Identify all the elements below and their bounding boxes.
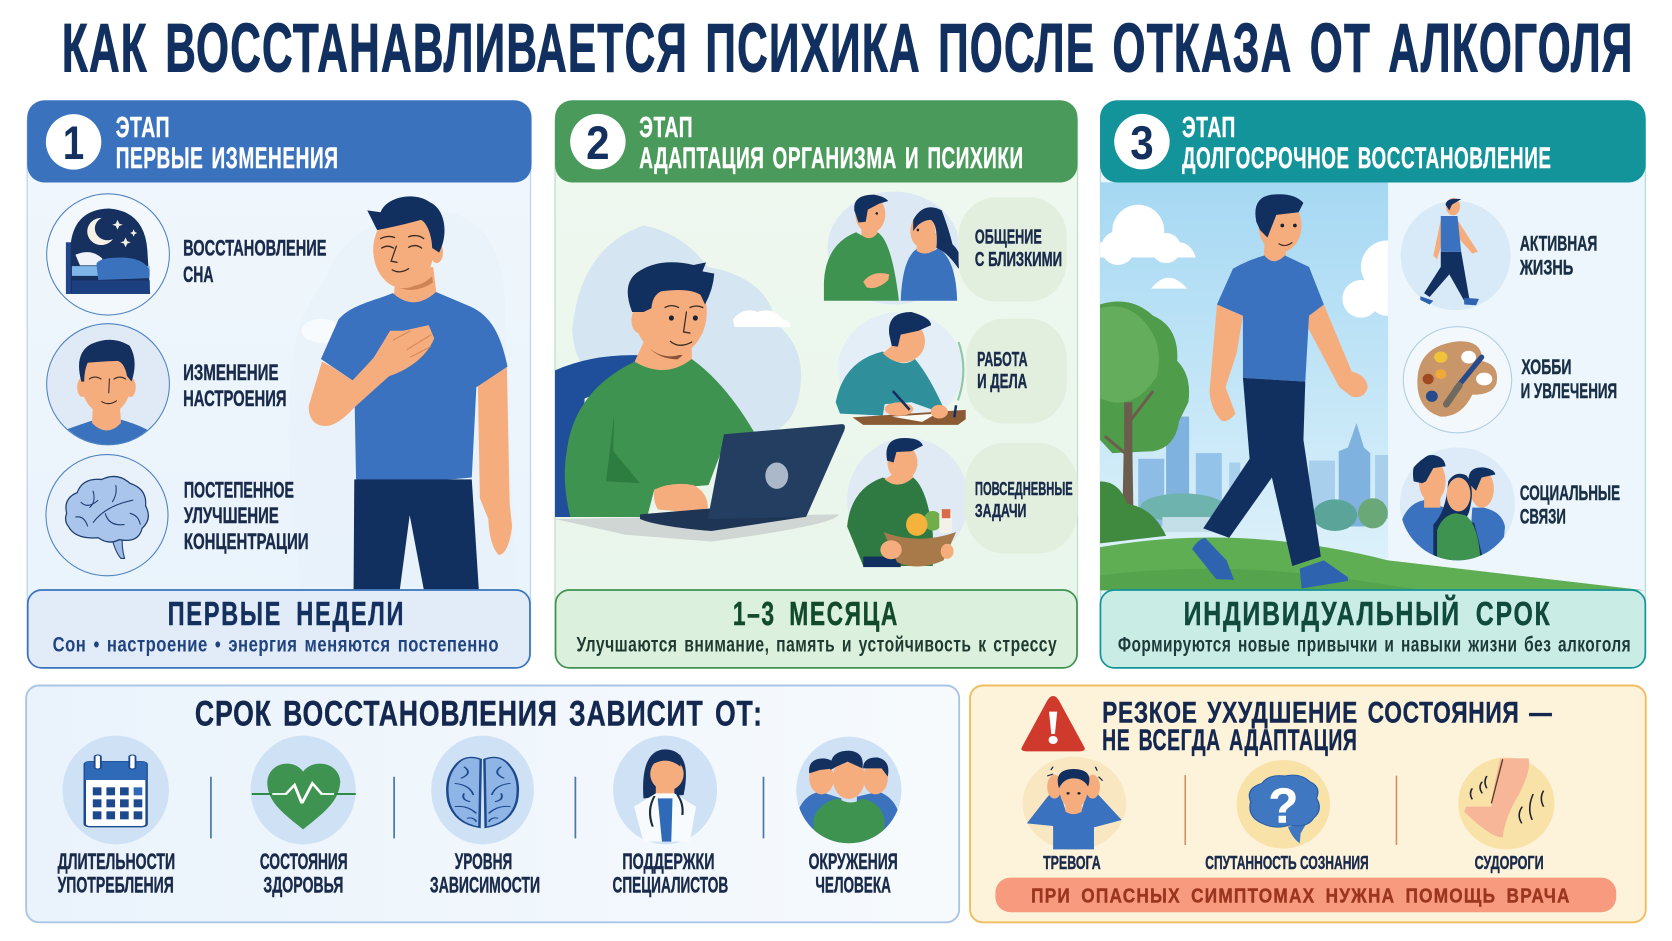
stage 1 header: ПЕРВЫЕ ИЗМЕНЕНИЯ bbox=[116, 142, 339, 175]
stage 2 header bbox=[555, 100, 1078, 182]
panel: stage 1 bbox=[27, 100, 532, 668]
stage 2 header: 2 bbox=[586, 117, 610, 169]
warning labels: СПУТАННОСТЬ СОЗНАНИЯ bbox=[1205, 852, 1369, 873]
warning heading: НЕ ВСЕГДА АДАПТАЦИЯ bbox=[1102, 724, 1357, 757]
stage 1 duration box: ПЕРВЫЕ НЕДЕЛИ bbox=[168, 596, 405, 633]
icon bubbles: activity backgrounds bbox=[959, 197, 1077, 554]
icon: palette hobby bbox=[1403, 327, 1512, 433]
stage 3 duration box bbox=[1100, 590, 1645, 668]
labels: first changes: УЛУЧШЕНИЕ bbox=[184, 503, 279, 528]
factor labels: ДЛИТЕЛЬНОСТИ bbox=[58, 849, 175, 874]
stage 3 header: 3 bbox=[1130, 117, 1154, 169]
warning panel background bbox=[970, 685, 1646, 922]
callout: see a doctor: ПРИ ОПАСНЫХ СИМПТОМАХ НУЖНА ПОМОЩЬ ВРАЧА bbox=[1031, 885, 1571, 907]
divider bbox=[211, 777, 763, 838]
labels: first changes: ИЗМЕНЕНИЕ bbox=[183, 360, 279, 385]
labels: long-term recovery: ЖИЗНЬ bbox=[1519, 255, 1573, 279]
factor labels: ЗАВИСИМОСТИ bbox=[430, 873, 540, 898]
factor labels: УРОВНЯ bbox=[455, 849, 512, 874]
stage 2 header: АДАПТАЦИЯ ОРГАНИЗМА И ПСИХИКИ bbox=[639, 142, 1024, 175]
stage 3 header: ЭТАП bbox=[1182, 112, 1236, 144]
labels: adaptation: ОБЩЕНИЕ bbox=[975, 227, 1042, 249]
icon: brain bbox=[46, 455, 168, 576]
labels: long-term recovery: И УВЛЕЧЕНИЯ bbox=[1521, 379, 1617, 403]
warning labels: ТРЕВОГА bbox=[1043, 852, 1101, 873]
factor labels: ПОДДЕРЖКИ bbox=[622, 849, 714, 874]
labels: adaptation: РАБОТА bbox=[977, 349, 1028, 371]
labels: long-term recovery: ХОББИ bbox=[1521, 355, 1571, 379]
labels: first changes: СНА bbox=[183, 262, 214, 287]
labels: adaptation: С БЛИЗКИМИ bbox=[975, 249, 1062, 271]
icon: active life bbox=[1401, 198, 1511, 310]
labels: first changes: НАСТРОЕНИЯ bbox=[183, 386, 287, 411]
stage 1 duration box bbox=[28, 590, 530, 668]
labels: first changes: КОНЦЕНТРАЦИИ bbox=[184, 529, 309, 554]
labels: long-term recovery bbox=[1519, 232, 1620, 528]
labels: adaptation: ПОВСЕДНЕВНЫЕ bbox=[975, 478, 1073, 499]
icon: calendar bbox=[62, 736, 169, 844]
stage 2 duration box bbox=[556, 590, 1077, 668]
panel: recovery factors bbox=[26, 685, 959, 922]
icon: confusion brain bbox=[1237, 760, 1330, 849]
icon: work and tasks bbox=[836, 312, 966, 425]
panel 2 background bbox=[555, 107, 1078, 668]
warning labels bbox=[1043, 852, 1544, 873]
panel: stage 3 bbox=[1100, 100, 1646, 668]
factor labels: ЧЕЛОВЕКА bbox=[815, 873, 891, 898]
icon: people around bbox=[795, 737, 901, 843]
icon: doctor bbox=[613, 736, 717, 844]
panel 3 background bbox=[1100, 107, 1645, 668]
illustration: man at laptop bbox=[555, 225, 845, 542]
stage 2 duration box: Улучшаются внимание, память и устойчивость к стрессу bbox=[576, 633, 1057, 656]
icon: confusion brain: ? bbox=[1268, 780, 1298, 834]
callout: see a doctor bbox=[995, 878, 1616, 912]
stage 1 header bbox=[27, 100, 532, 182]
labels: adaptation bbox=[975, 227, 1073, 521]
icon: sleep bbox=[47, 194, 169, 315]
icon: heart health bbox=[251, 736, 356, 844]
icon: everyday chores bbox=[847, 438, 969, 567]
factor labels bbox=[58, 849, 898, 898]
icon: social ties bbox=[1400, 447, 1515, 560]
stage 1 header: ЭТАП bbox=[116, 112, 170, 144]
labels: long-term recovery: СВЯЗИ bbox=[1520, 504, 1566, 528]
icon: brain dependence bbox=[431, 736, 534, 844]
illustration: man with hand on chest bbox=[288, 196, 516, 589]
labels: adaptation: И ДЕЛА bbox=[977, 371, 1027, 393]
stage 2 header: ЭТАП bbox=[639, 112, 693, 144]
factors heading: СРОК ВОССТАНОВЛЕНИЯ ЗАВИСИТ ОТ: bbox=[195, 695, 763, 734]
labels: long-term recovery: АКТИВНАЯ bbox=[1520, 232, 1597, 256]
icon: anxiety bbox=[1023, 757, 1126, 850]
factors panel background bbox=[26, 685, 959, 922]
labels: first changes: ВОССТАНОВЛЕНИЕ bbox=[183, 236, 327, 261]
icon: talking with relatives bbox=[824, 192, 960, 304]
icon: warning triangle bbox=[1021, 696, 1085, 751]
stage 2 duration box: 1–3 МЕСЯЦА bbox=[733, 596, 899, 633]
park scene with walking man bbox=[1100, 182, 1645, 590]
stage 1 duration box: Сон • настроение • энергия меняются постепенно bbox=[53, 633, 499, 656]
labels: first changes bbox=[183, 236, 327, 554]
warning heading bbox=[1102, 696, 1553, 757]
labels: first changes: ПОСТЕПЕННОЕ bbox=[184, 477, 294, 502]
panel: warning bbox=[970, 685, 1646, 922]
stage 3 duration box: ИНДИВИДУАЛЬНЫЙ СРОК bbox=[1184, 594, 1552, 633]
factor labels: УПОТРЕБЛЕНИЯ bbox=[58, 873, 174, 898]
factor labels: ОКРУЖЕНИЯ bbox=[809, 849, 898, 874]
stage 1 header: 1 bbox=[63, 117, 84, 169]
factor labels: ЗДОРОВЬЯ bbox=[263, 873, 343, 898]
panel: stage 2 bbox=[555, 100, 1078, 668]
factor labels: СОСТОЯНИЯ bbox=[260, 849, 348, 874]
labels: adaptation: ЗАДАЧИ bbox=[975, 500, 1026, 521]
panel 1 background bbox=[27, 107, 530, 668]
warning labels: СУДОРОГИ bbox=[1475, 852, 1544, 873]
divider bbox=[1185, 775, 1396, 845]
stage 3 header bbox=[1100, 100, 1646, 182]
icon: cramp leg bbox=[1458, 757, 1554, 849]
factor labels: СПЕЦИАЛИСТОВ bbox=[612, 873, 728, 898]
icon: mood face bbox=[47, 324, 169, 451]
